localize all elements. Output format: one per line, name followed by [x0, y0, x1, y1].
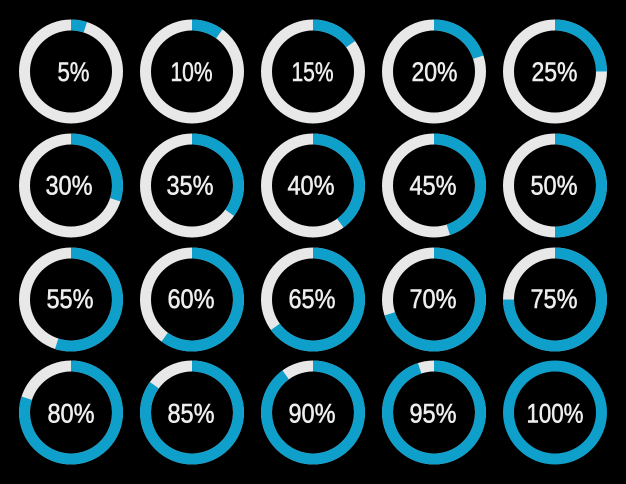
ring: 40%: 40%: [288, 170, 334, 200]
ring: 60%: [146, 253, 238, 346]
ring: 35%: [146, 139, 238, 232]
ring: 80%: 80%: [48, 398, 94, 428]
ring: 100%: [508, 366, 602, 459]
ring: 75%: 75%: [530, 284, 578, 314]
ring: 5%: [24, 25, 118, 118]
ring: 85%: 85%: [168, 398, 214, 428]
ring: 30%: [24, 139, 118, 232]
ring: 50%: [508, 139, 602, 232]
ring: 65%: [266, 253, 360, 346]
ring: 45%: 45%: [410, 170, 456, 200]
ring: 20%: 20%: [412, 57, 458, 87]
ring: 65%: 65%: [288, 284, 336, 314]
ring: 50%: 50%: [530, 170, 578, 200]
ring: 25%: 25%: [532, 57, 578, 87]
ring: 95%: [388, 366, 480, 459]
ring: 35%: 35%: [166, 170, 214, 200]
ring: 90%: 90%: [288, 398, 336, 428]
ring: 10%: 10%: [170, 57, 212, 87]
ring: 80%: [24, 366, 118, 459]
ring: 95%: 95%: [410, 398, 456, 428]
ring: 40%: [266, 139, 360, 232]
ring: 60%: 60%: [168, 284, 214, 314]
ring: 90%: [266, 366, 360, 459]
ring: 100%: 100%: [526, 398, 584, 428]
ring: 15%: [266, 25, 360, 118]
ring: 55%: [24, 253, 118, 346]
ring: 20%: [388, 25, 480, 118]
ring: 10%: [146, 25, 238, 118]
ring: 70%: 70%: [410, 284, 456, 314]
ring: 85%: [146, 366, 238, 459]
ring: 5%: 5%: [58, 57, 90, 87]
ring: 55%: 55%: [46, 284, 94, 314]
ring: 30%: 30%: [46, 170, 92, 200]
ring: 15%: 15%: [292, 57, 334, 87]
ring: 45%: [388, 139, 480, 232]
ring: 25%: [508, 25, 602, 118]
ring: 70%: [388, 253, 480, 346]
ring: 75%: [508, 253, 602, 346]
